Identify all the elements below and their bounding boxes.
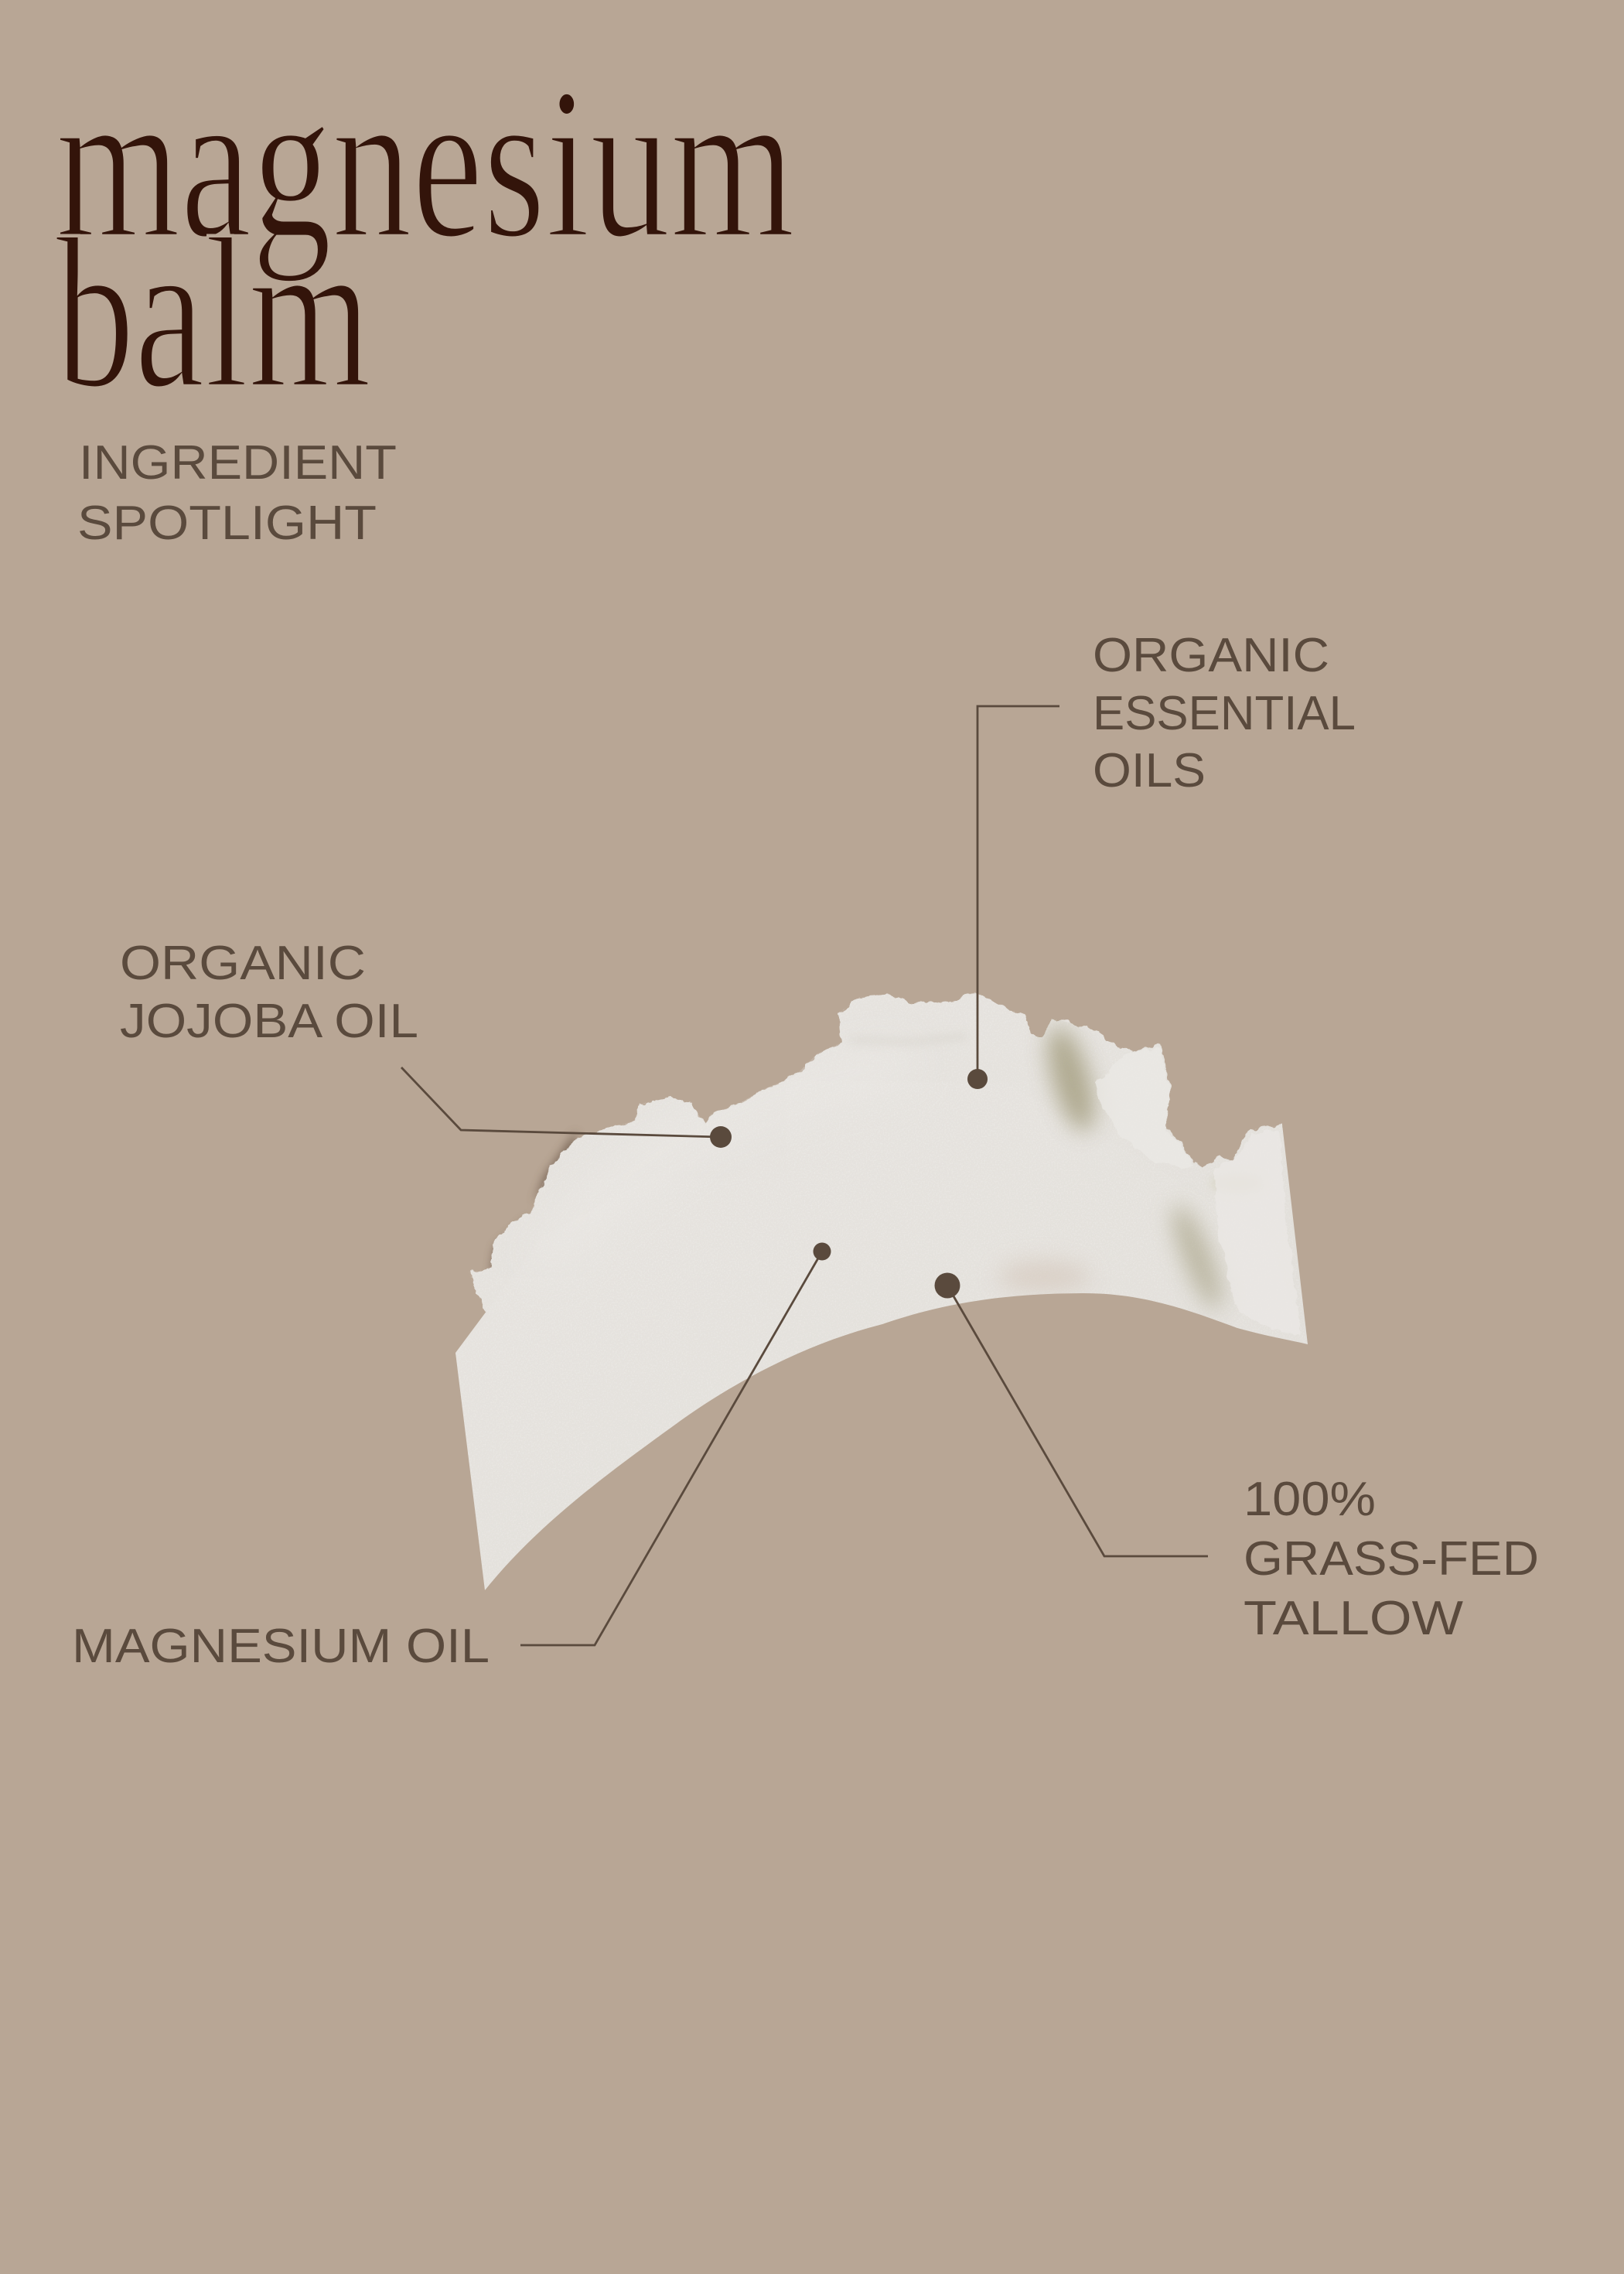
callout: 100% grass-fed tallow: 100% bbox=[1244, 1473, 1376, 1526]
subtitle: INGREDIENT bbox=[79, 436, 397, 490]
title: magnesium bbox=[56, 43, 795, 283]
callout: 100% grass-fed tallow: TALLOW bbox=[1244, 1592, 1464, 1645]
callout: organic jojoba oil: JOJOBA OIL bbox=[120, 995, 418, 1048]
subtitle: SPOTLIGHT bbox=[77, 497, 377, 550]
callout: organic essential oils: ORGANIC bbox=[1093, 629, 1329, 682]
callout: organic essential oils: OILS bbox=[1093, 744, 1206, 797]
title bbox=[56, 43, 795, 433]
callout: organic essential oils: ESSENTIAL bbox=[1093, 687, 1356, 740]
callout: 100% grass-fed tallow bbox=[934, 1273, 1539, 1645]
callout: magnesium oil: MAGNESIUM OIL bbox=[72, 1620, 490, 1673]
callout: 100% grass-fed tallow: GRASS-FED bbox=[1244, 1532, 1539, 1586]
subtitle bbox=[77, 436, 397, 550]
balm swatch bbox=[455, 992, 1308, 1590]
callout: magnesium oil bbox=[72, 1242, 831, 1673]
lump: right ridge bbox=[1096, 1048, 1301, 1335]
callout: organic jojoba oil: ORGANIC bbox=[120, 937, 366, 990]
callout: organic jojoba oil bbox=[120, 937, 732, 1148]
callout: organic essential oils bbox=[967, 629, 1356, 1089]
title: balm bbox=[56, 193, 371, 433]
